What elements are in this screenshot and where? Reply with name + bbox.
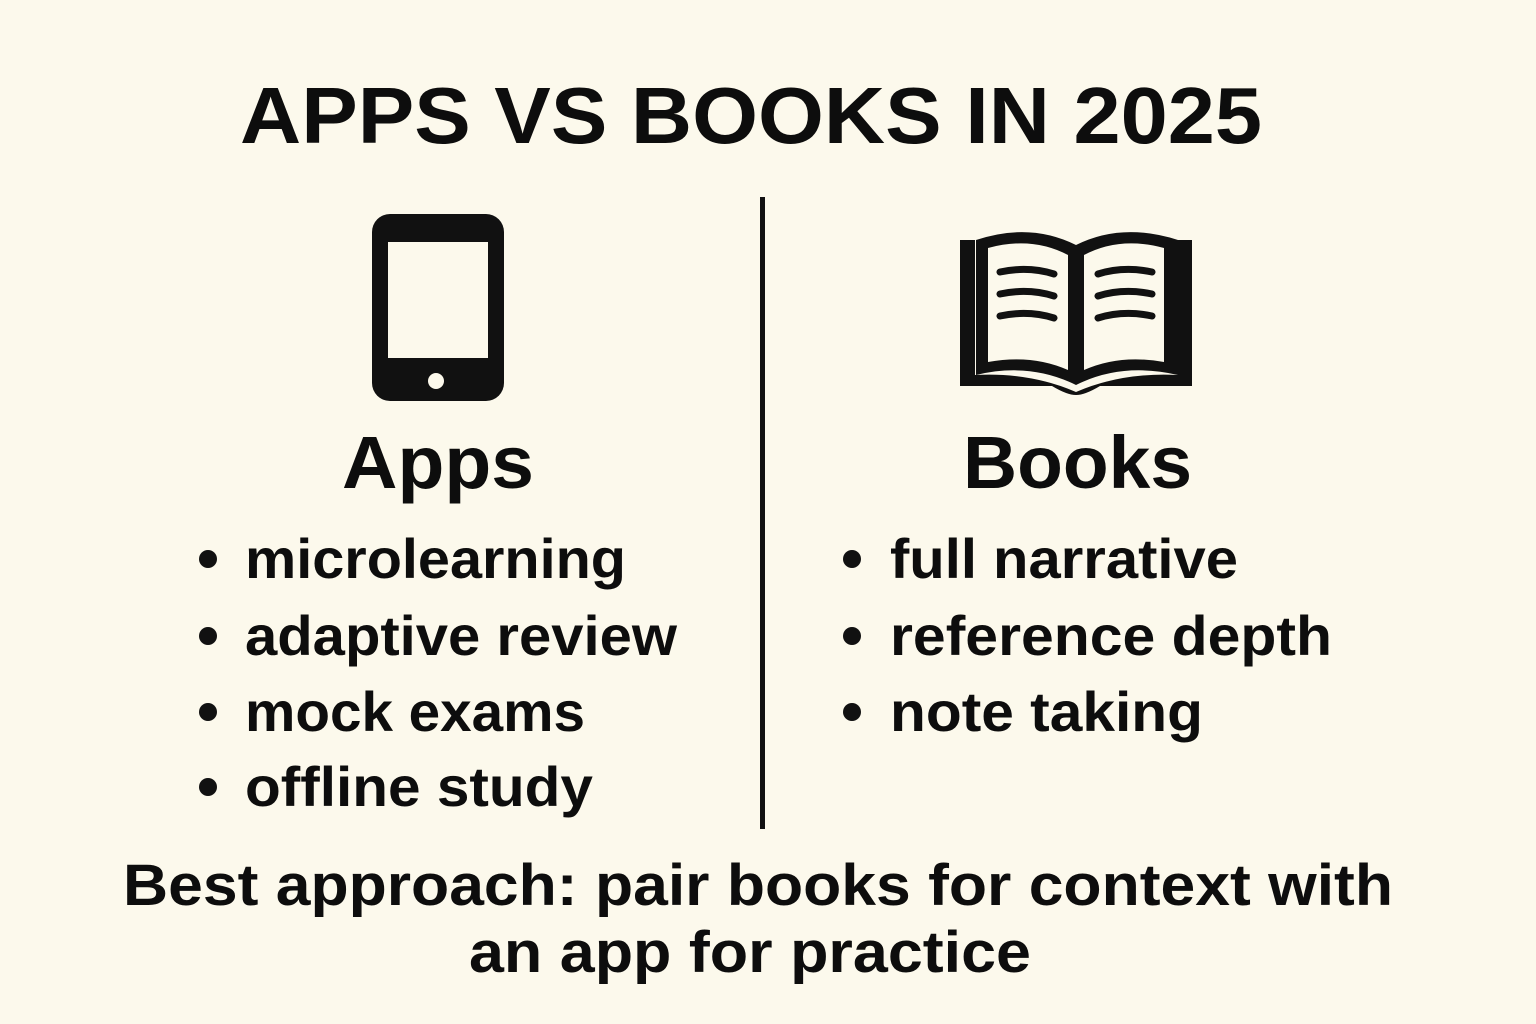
list: apps features: microlearning — [245, 527, 626, 590]
list: books features — [843, 527, 1332, 743]
icon: open book — [960, 232, 1192, 395]
conclusion text — [123, 853, 1393, 985]
list: apps features — [199, 527, 677, 818]
panel: apps — [199, 214, 677, 818]
conclusion text: an app for practice — [469, 920, 1031, 985]
title: APPS VS BOOKS IN 2025 — [240, 71, 1262, 160]
panel: books — [843, 232, 1332, 743]
list: apps features: offline study — [245, 755, 593, 818]
list: books features: full narrative — [890, 527, 1238, 590]
icon: tablet — [372, 214, 504, 401]
divider — [760, 197, 765, 829]
heading: apps: Apps — [342, 421, 534, 504]
list: books features: reference depth — [890, 604, 1332, 667]
list: books features: note taking — [890, 680, 1203, 743]
heading: books: Books — [963, 421, 1192, 504]
conclusion text: Best approach: pair books for context with — [123, 853, 1393, 918]
list: apps features: adaptive review — [245, 604, 677, 667]
list: apps features: mock exams — [245, 680, 585, 743]
